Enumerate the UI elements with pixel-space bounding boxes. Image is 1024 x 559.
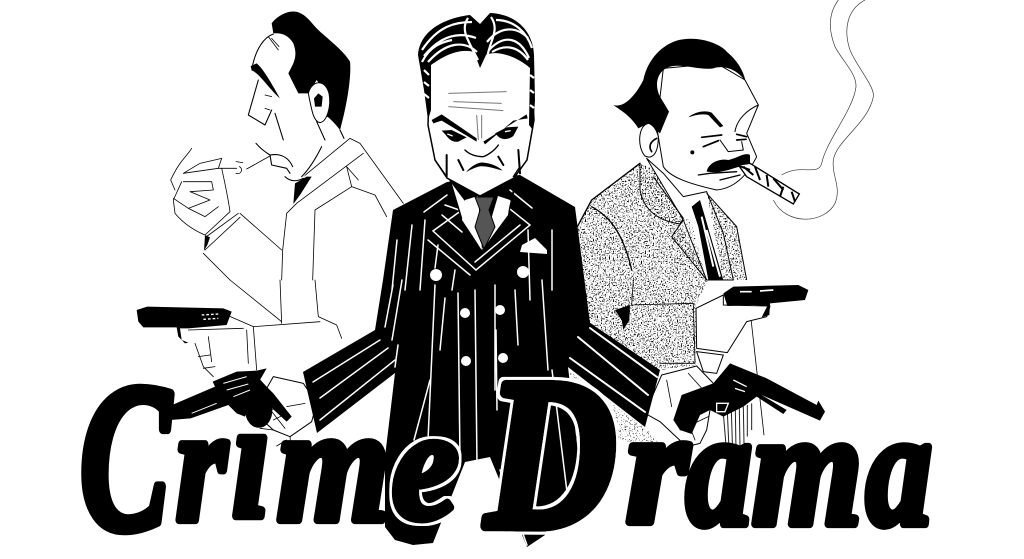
jacket lines — [282, 138, 403, 280]
lapel outlines — [640, 163, 747, 280]
eyes — [442, 127, 518, 142]
hatching — [723, 403, 752, 457]
brow — [251, 63, 280, 98]
second hand — [255, 377, 317, 437]
face lines — [248, 34, 344, 181]
revolver — [168, 368, 292, 422]
pistol — [137, 307, 232, 343]
figure: left man in white jacket lighting a cigarette — [137, 12, 403, 457]
moustache — [707, 154, 750, 173]
hand on pistol — [696, 295, 770, 353]
hair — [613, 39, 746, 133]
tie — [293, 177, 312, 204]
mouth — [466, 162, 503, 172]
pocket square — [520, 238, 547, 254]
necktie — [692, 200, 723, 280]
revolver — [673, 363, 825, 434]
cigar — [738, 163, 799, 204]
necktie — [475, 197, 495, 249]
jacket lower speckle — [570, 372, 660, 510]
right man lower — [615, 280, 825, 457]
forehead wrinkles and nose — [448, 92, 507, 140]
letter m: m — [277, 373, 390, 556]
jacket speckle — [570, 163, 708, 370]
buttons — [430, 266, 529, 366]
face — [657, 63, 758, 190]
cuff and hand — [645, 366, 713, 447]
face — [428, 40, 534, 196]
left man upper body — [171, 12, 403, 280]
pistol — [723, 285, 808, 317]
hair — [272, 12, 350, 130]
shirt collar — [450, 178, 517, 252]
lips — [698, 172, 740, 180]
brows — [432, 114, 528, 144]
shirt — [647, 158, 733, 280]
right lapel speckle — [707, 193, 747, 280]
hand on pistol — [188, 315, 253, 377]
suit pinstripes — [313, 190, 657, 545]
right sleeve stripes — [570, 328, 657, 412]
letter a: a — [686, 378, 752, 559]
figure: right man with cigar and speckled jacket — [570, 0, 873, 510]
hair — [418, 13, 535, 130]
letter i: i — [232, 365, 270, 554]
hair highlights — [422, 17, 534, 108]
cheek creases — [447, 150, 520, 177]
hand — [171, 148, 230, 235]
cuff — [205, 213, 240, 250]
hem lines — [230, 280, 342, 370]
left sleeve stripes — [313, 340, 395, 420]
brow — [688, 111, 723, 127]
sleeve lines — [203, 213, 282, 280]
jacket outline — [577, 163, 640, 270]
eyes and nose — [702, 134, 747, 147]
jacket panel lines — [632, 280, 764, 435]
facial features — [432, 92, 528, 177]
right man head — [613, 39, 799, 280]
ear — [640, 123, 658, 157]
letter m: m — [752, 378, 862, 559]
lower lapel speckle — [672, 217, 707, 280]
head and neck — [248, 33, 343, 182]
title: Crime Drama — [80, 334, 932, 559]
smoke — [773, 0, 873, 219]
cigarette — [218, 156, 270, 174]
ear — [308, 83, 330, 123]
right man details — [577, 0, 873, 280]
suit — [303, 175, 660, 547]
figure: centre man in pinstripe suit — [303, 13, 660, 547]
letter e: e — [392, 376, 459, 553]
letter r: r — [176, 374, 228, 557]
letter a: a — [866, 378, 932, 559]
lapel lines — [424, 190, 532, 275]
lapel speckle — [640, 163, 683, 224]
letter r: r — [626, 376, 690, 559]
left man lower arm and gun — [137, 280, 342, 457]
mole — [690, 150, 694, 154]
jacket fill — [282, 138, 403, 280]
